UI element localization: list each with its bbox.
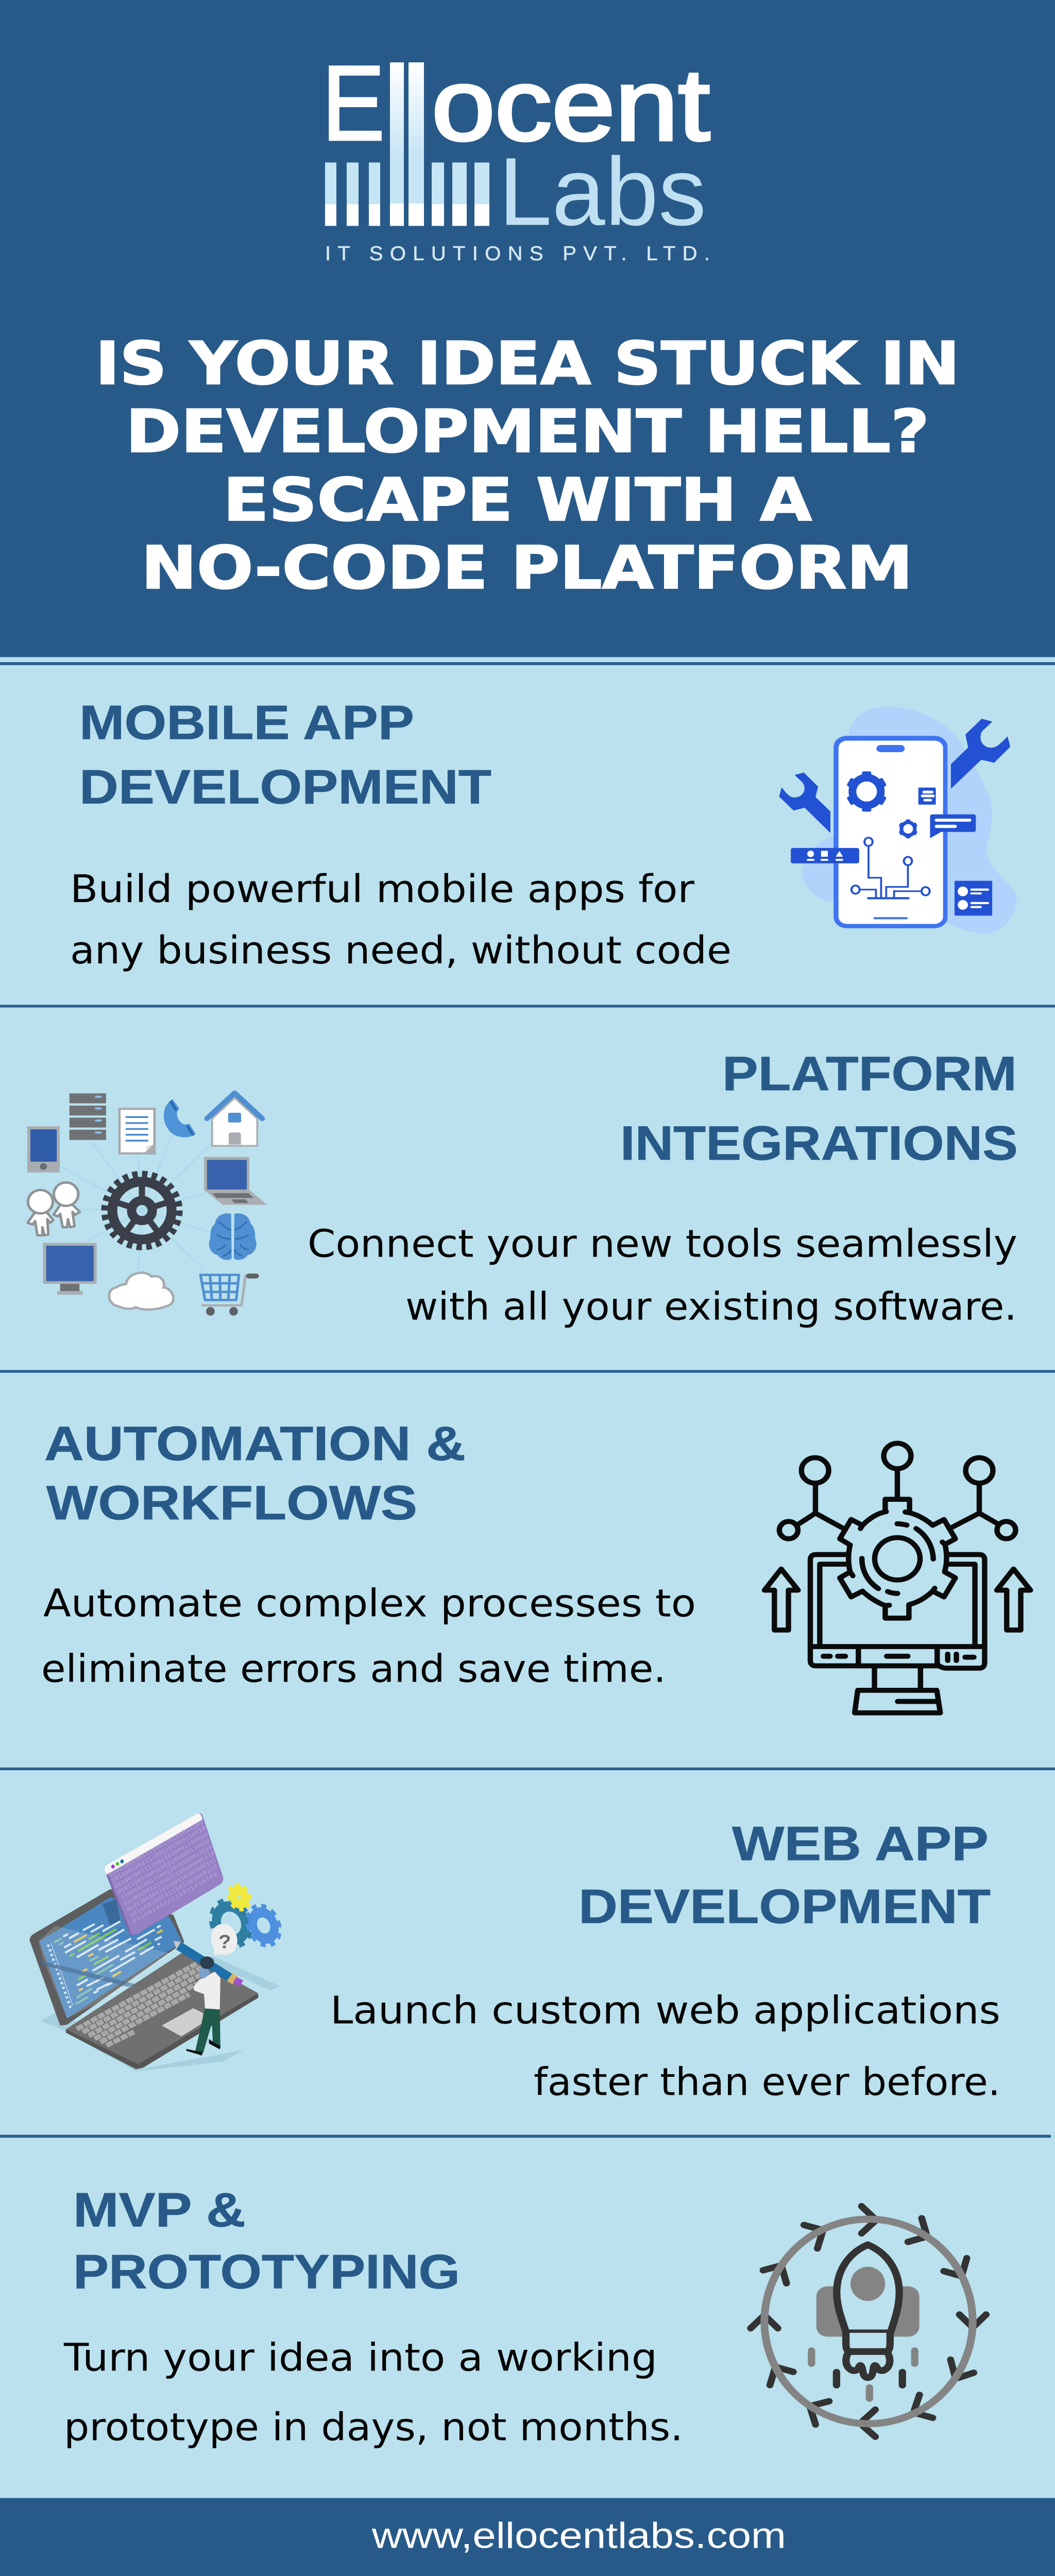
icon: house — [207, 1093, 262, 1146]
text: integrations description: Connect your new tools seamlessly — [308, 1221, 1017, 1266]
icon: document — [118, 1108, 156, 1155]
floating code window: 0101100100111100110100011101 — [107, 1819, 205, 1879]
heading: mvp and prototyping — [73, 2183, 460, 2299]
panel: automation and workflows — [0, 1373, 1055, 1768]
text: integrations description: with all your existing software. — [405, 1284, 1017, 1329]
text: mvp description: Turn your idea into a working — [63, 2335, 657, 2380]
title: ESCAPE WITH A — [223, 466, 812, 534]
heading: web app development: WEB APP — [732, 1817, 989, 1871]
text: mobile app description — [70, 867, 731, 973]
floating code window: 0110010011110011010001100010 — [114, 1832, 209, 1890]
heading: platform integrations: INTEGRATIONS — [620, 1116, 1018, 1171]
text: web app description: faster than ever before. — [534, 2059, 1000, 2104]
icon: servers — [70, 1093, 106, 1140]
logo: Ellocent Labs: E — [322, 44, 385, 163]
floating code window: 1011001001111001101000110 — [129, 1864, 218, 1919]
title: DEVELOPMENT HELL? — [126, 398, 929, 466]
heading: platform integrations — [620, 1047, 1018, 1171]
heading: mobile app development — [79, 696, 491, 814]
icon: monitor with gear and nodes — [764, 1443, 1030, 1713]
question bubble: ? — [218, 1931, 231, 1953]
gears — [205, 1882, 285, 1951]
text: automation description — [41, 1581, 696, 1691]
heading: web app development: DEVELOPMENT — [578, 1879, 991, 1934]
logo: Ellocent Labs — [322, 44, 710, 265]
panel: web app development — [0, 1771, 1055, 2135]
logo: Ellocent Labs: ocent — [432, 48, 710, 162]
floating code window: 0110010011110011110100001110 — [123, 1851, 216, 1908]
developer figure — [186, 1956, 220, 2056]
text: integrations description — [308, 1221, 1017, 1329]
icon: brain — [209, 1213, 257, 1260]
logo: Ellocent Labs: Labs — [499, 138, 706, 246]
text: web app description: Launch custom web applications — [330, 1988, 1000, 2033]
title: IS YOUR IDEA STUCK IN — [95, 330, 960, 398]
text: automation description: Automate complex processes to — [43, 1581, 696, 1625]
panel: header — [0, 0, 1055, 657]
icon: monitor — [43, 1243, 97, 1295]
text: web app description — [330, 1988, 1000, 2104]
icon: cloud — [109, 1273, 173, 1310]
icon: isometric laptop and developer — [29, 1813, 285, 2072]
text: mobile app description: any business need, without code — [70, 928, 731, 973]
icon: phone with tools — [779, 707, 1016, 934]
floating code window: 0101100100111100110101000111 — [126, 1857, 217, 1913]
heading: platform integrations: PLATFORM — [722, 1047, 1017, 1101]
heading: automation and workflows — [44, 1417, 466, 1530]
question bubble — [208, 1922, 240, 1957]
footer — [0, 2498, 1055, 2576]
heading: mobile app development: DEVELOPMENT — [79, 760, 491, 814]
text: automation description: eliminate errors and save time. — [41, 1646, 666, 1691]
heading: mobile app development: MOBILE APP — [79, 696, 414, 750]
heading: mvp and prototyping: PROTOTYPING — [73, 2245, 460, 2299]
floating code window: 0101100110011001101000110010 — [117, 1838, 211, 1896]
panel: platform integrations — [0, 1008, 1055, 1370]
text: mvp description: prototype in days, not months. — [64, 2404, 683, 2449]
laptop screen — [29, 1889, 184, 2026]
heading: automation and workflows: AUTOMATION & — [44, 1417, 466, 1471]
heading: mvp and prototyping: MVP & — [73, 2183, 246, 2237]
footer website: www,ellocentlabs.com — [371, 2516, 786, 2556]
icon: telephone — [164, 1099, 196, 1138]
floating code window — [105, 1813, 226, 1936]
giant pencil — [174, 1941, 242, 1984]
panel: mobile app development — [0, 665, 1055, 1005]
logo: Ellocent Labs: IT SOLUTIONS PVT. LTD. — [325, 242, 710, 265]
floating code window: 1100101001110011010100011010 — [120, 1844, 214, 1902]
icon: laptop — [204, 1157, 267, 1205]
text: mvp description — [63, 2335, 683, 2449]
title: NO-CODE PLATFORM — [141, 534, 913, 602]
text: mobile app description: Build powerful mobile apps for — [70, 867, 694, 911]
icon: tablet — [27, 1126, 60, 1173]
icon: people — [28, 1182, 80, 1235]
laptop base — [66, 1952, 258, 2069]
heading: automation and workflows: WORKFLOWS — [46, 1476, 417, 1530]
icon: rocket in ring — [751, 2206, 986, 2437]
panel: mvp and prototyping — [0, 2138, 1055, 2498]
heading: web app development — [578, 1817, 991, 1934]
floating code window: 0110010011110011010100 — [132, 1872, 218, 1925]
icon: shopping cart — [200, 1274, 259, 1316]
floating code window: 1011001001111001101000110110 — [111, 1825, 207, 1885]
title — [95, 330, 960, 602]
icon: integrations hub — [27, 1093, 267, 1316]
icon: central gear — [105, 1174, 179, 1247]
